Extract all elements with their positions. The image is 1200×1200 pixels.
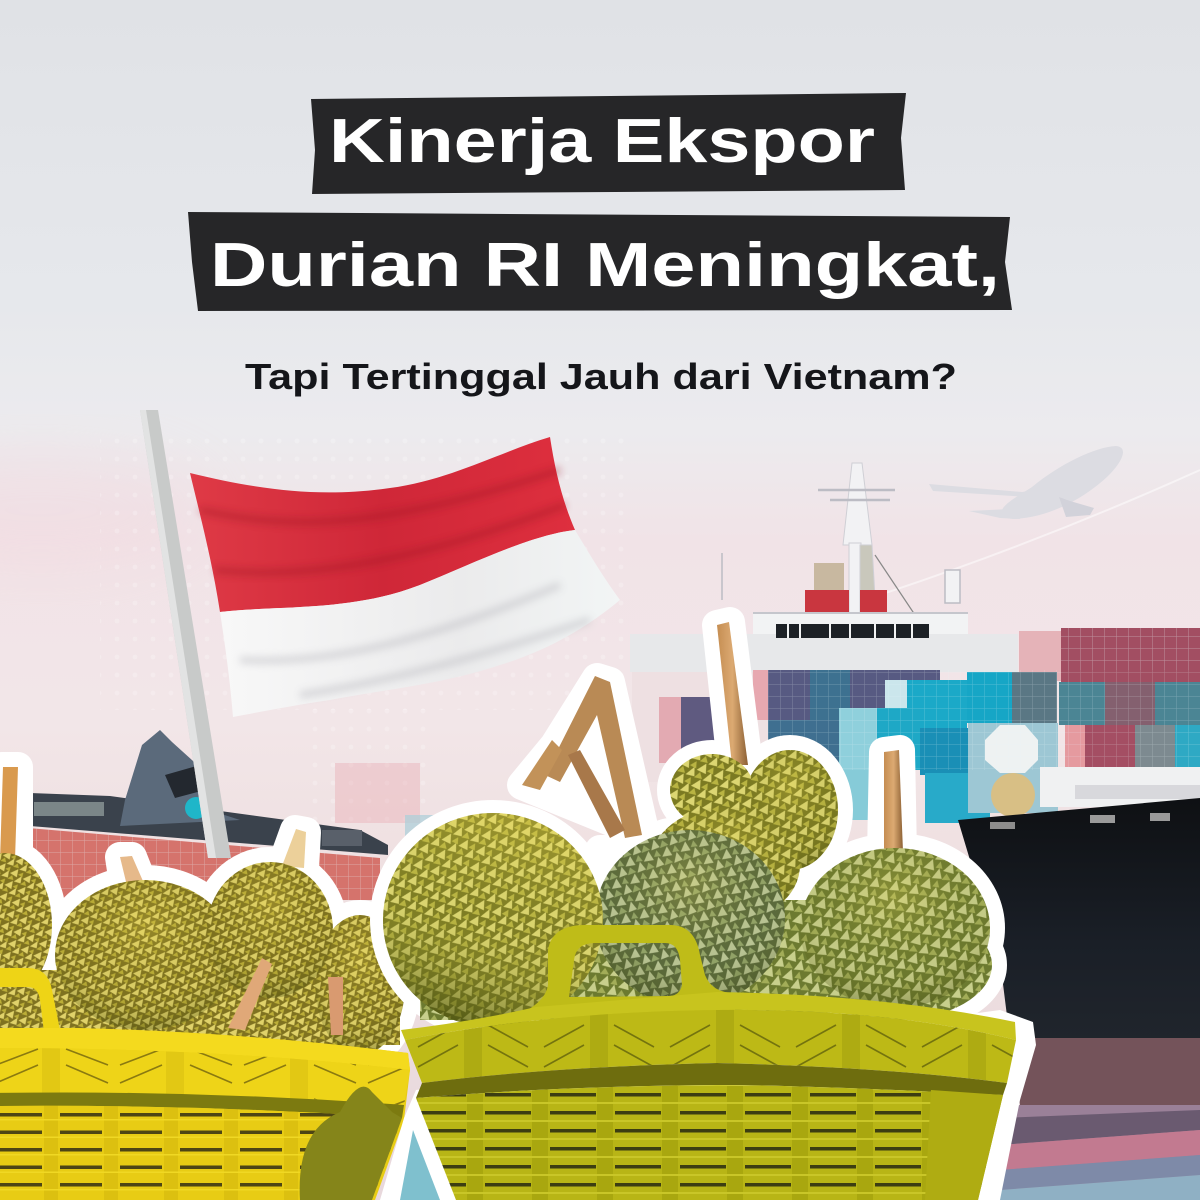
flagpole — [140, 410, 231, 858]
durian group right with sticker outline — [383, 622, 992, 1027]
basket dark band — [416, 1063, 1007, 1098]
cargo ship superstructure — [630, 463, 1018, 782]
black ship hull — [958, 798, 1200, 1040]
bridge block — [630, 613, 1018, 782]
stems in front — [228, 958, 272, 1030]
left basket handle — [0, 968, 60, 1032]
durian fruits right — [383, 750, 992, 1027]
basket lattice — [416, 1085, 1003, 1200]
title bar: Durian RI Meningkat: Durian RI Meningkat, — [210, 231, 1000, 300]
stems left — [0, 767, 18, 860]
basket rim — [401, 992, 1016, 1040]
sticker outline right — [385, 622, 992, 1025]
left ship — [28, 730, 388, 900]
title bar: Durian RI Meningkat — [188, 212, 1012, 311]
water — [1000, 1105, 1200, 1200]
Indonesian flag — [190, 437, 620, 717]
ship mast — [722, 463, 960, 615]
white outline beside right basket — [380, 1010, 1036, 1200]
basket chevron band — [405, 1010, 1016, 1083]
sticker outline left — [0, 767, 405, 1055]
durian group left with sticker outline — [0, 767, 405, 1055]
stems right — [717, 622, 748, 765]
subtitle: Tapi Tertinggal Jauh dari Vietnam? — [245, 356, 957, 397]
right basket — [401, 925, 1016, 1200]
blue water gap — [400, 1130, 440, 1200]
durian fruits left — [0, 853, 405, 1055]
red stripe — [190, 437, 575, 612]
white stripe — [220, 530, 620, 717]
left basket — [0, 968, 410, 1200]
airplane — [929, 446, 1123, 519]
red funnel deck — [805, 563, 887, 615]
title bar: Kinerja Ekspor — [311, 93, 906, 194]
basket handle — [510, 925, 735, 1020]
title bar: Kinerja Ekspor: Kinerja Ekspor — [329, 107, 875, 176]
crane machinery — [120, 730, 240, 826]
container stacks — [659, 628, 1200, 823]
